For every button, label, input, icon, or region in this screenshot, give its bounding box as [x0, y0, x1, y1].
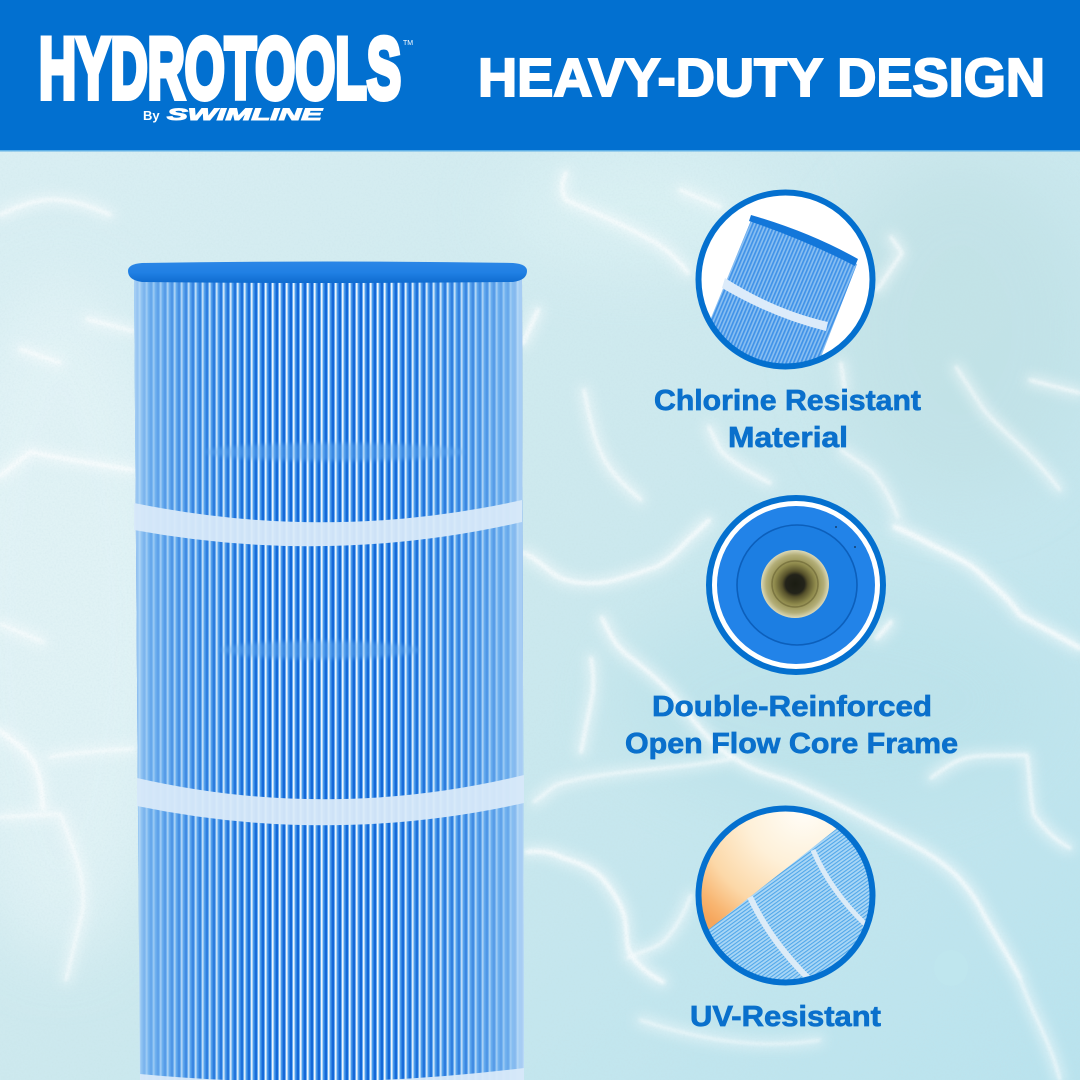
label: double-reinforced open flow core frame: Double-Reinforced: [652, 691, 932, 723]
circle photo: filter end cap: [709, 498, 883, 672]
title: HEAVY-DUTY DESIGN: [478, 48, 1045, 108]
logo: TM: [403, 40, 413, 47]
circle photo: filter top: [690, 192, 872, 380]
filter top rim: [128, 262, 527, 283]
logo: [39, 21, 413, 124]
label: chlorine resistant material: Material: [728, 422, 848, 454]
filter lower band: [137, 775, 524, 825]
logo: By: [143, 108, 160, 123]
large pool filter cartridge: [128, 262, 527, 1080]
label: UV-resistant: UV-Resistant: [690, 1001, 881, 1033]
circle photo: filter in sun: [695, 805, 885, 990]
label: chlorine resistant material: Chlorine Resistant: [654, 385, 921, 417]
water bubble: [934, 950, 968, 986]
logo: SWIMLINE: [167, 105, 323, 124]
feature: double-reinforced core: [625, 498, 958, 760]
label: double-reinforced open flow core frame: [625, 691, 958, 760]
label: double-reinforced open flow core frame: Open Flow Core Frame: [625, 728, 958, 760]
feature: UV-resistant: [690, 805, 885, 1033]
logo: HYDROTOOLS: [39, 21, 401, 117]
filter pleated body: [134, 278, 524, 1080]
header bar: [0, 0, 1080, 152]
label: chlorine resistant material: [654, 385, 921, 454]
filter upper band: [134, 500, 522, 546]
feature: chlorine resistant: [654, 192, 921, 454]
filter bottom band: [140, 1068, 524, 1080]
